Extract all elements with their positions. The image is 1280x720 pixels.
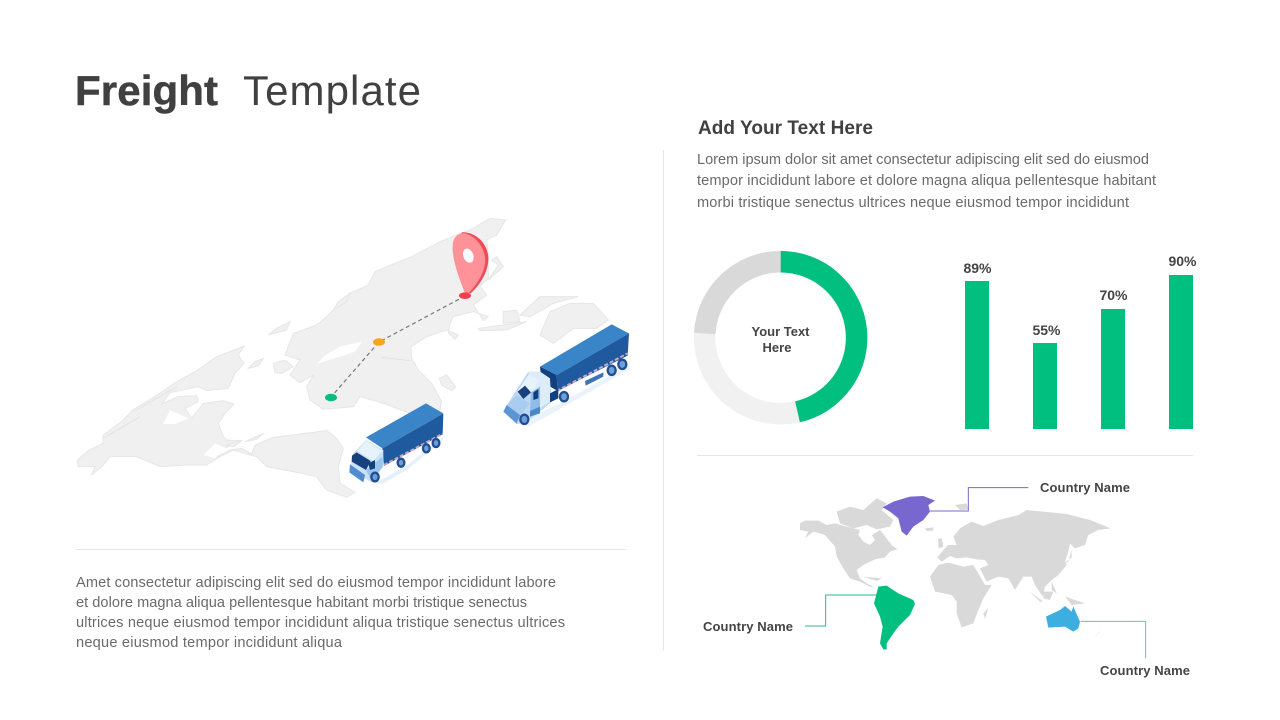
donut label: Your Text xyxy=(751,324,810,339)
left text block: et dolore magna aliqua pellentesque habitant morbi tristique senectus xyxy=(76,595,527,611)
label: South America: Country Name xyxy=(703,619,793,634)
map: grey land xyxy=(800,498,1111,640)
region: Australia xyxy=(1046,606,1080,632)
bar chart xyxy=(963,253,1197,429)
wheels xyxy=(371,439,439,481)
donut label xyxy=(751,324,810,355)
heading: Add Your Text Here xyxy=(698,118,873,139)
left text block: ultrices neque eiusmod tempor incididunt aliqua tristique senectus ultrices xyxy=(76,615,565,631)
map: Americas xyxy=(77,346,355,497)
bar chart: 70% xyxy=(1099,287,1128,303)
icon: location pin xyxy=(453,232,488,299)
truck: front left xyxy=(349,403,443,484)
title xyxy=(75,67,421,114)
label: Greenland: Country Name xyxy=(1040,480,1130,495)
map: Eurasia and Africa xyxy=(285,218,506,413)
isometric world map xyxy=(77,218,608,497)
title: Freight xyxy=(75,67,218,114)
region: Greenland xyxy=(883,496,935,536)
leader: Australia xyxy=(1081,621,1146,658)
donut label: Here xyxy=(763,340,791,355)
right text block xyxy=(697,152,1156,211)
right text block: Lorem ipsum dolor sit amet consectetur adipiscing elit sed do eiusmod xyxy=(697,152,1149,168)
left text block: Amet consectetur adipiscing elit sed do eiusmod tempor incididunt labore xyxy=(76,575,556,591)
world map xyxy=(800,488,1146,658)
label: Australia: Country Name xyxy=(1100,663,1190,678)
bar chart: 90% xyxy=(1168,253,1197,269)
wheels xyxy=(520,360,626,424)
leader: Greenland xyxy=(930,488,1028,511)
leader: South America xyxy=(805,595,877,626)
right text block: morbi tristique senectus ultrices neque eiusmod tempor incididunt xyxy=(697,195,1129,211)
bar chart: 55% xyxy=(1032,322,1061,338)
left text block: neque eiusmod tempor incididunt aliqua xyxy=(76,635,343,651)
donut chart xyxy=(705,262,857,414)
cab xyxy=(350,440,383,482)
map: Australia xyxy=(540,303,608,343)
truck: rear right xyxy=(503,324,630,427)
cab xyxy=(503,372,552,424)
marker: origin xyxy=(325,394,337,401)
marker: stop xyxy=(373,338,385,346)
region: South America xyxy=(874,586,915,649)
map: inland seas xyxy=(317,342,362,364)
left text block xyxy=(76,575,565,651)
right text block: tempor incididunt labore et dolore magna aliqua pellentesque habitant xyxy=(697,173,1156,189)
route line xyxy=(331,296,465,397)
bar chart: 89% xyxy=(963,260,992,276)
title: Template xyxy=(243,67,421,114)
